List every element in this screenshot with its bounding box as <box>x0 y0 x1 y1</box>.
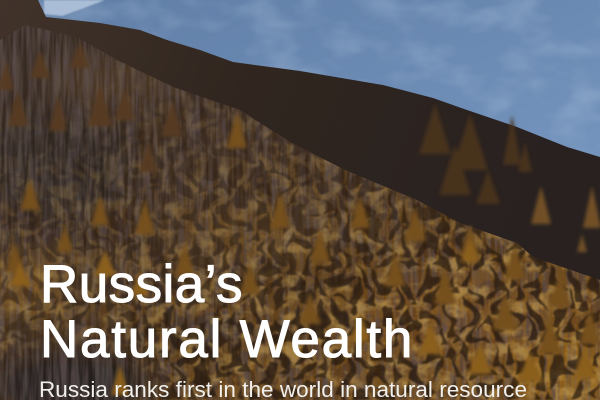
title <box>40 255 414 369</box>
title: Natural Wealth <box>40 310 414 369</box>
distant blue mountains <box>0 0 600 200</box>
title: Russia’s <box>40 255 243 314</box>
dark grassy ridge <box>0 0 600 300</box>
